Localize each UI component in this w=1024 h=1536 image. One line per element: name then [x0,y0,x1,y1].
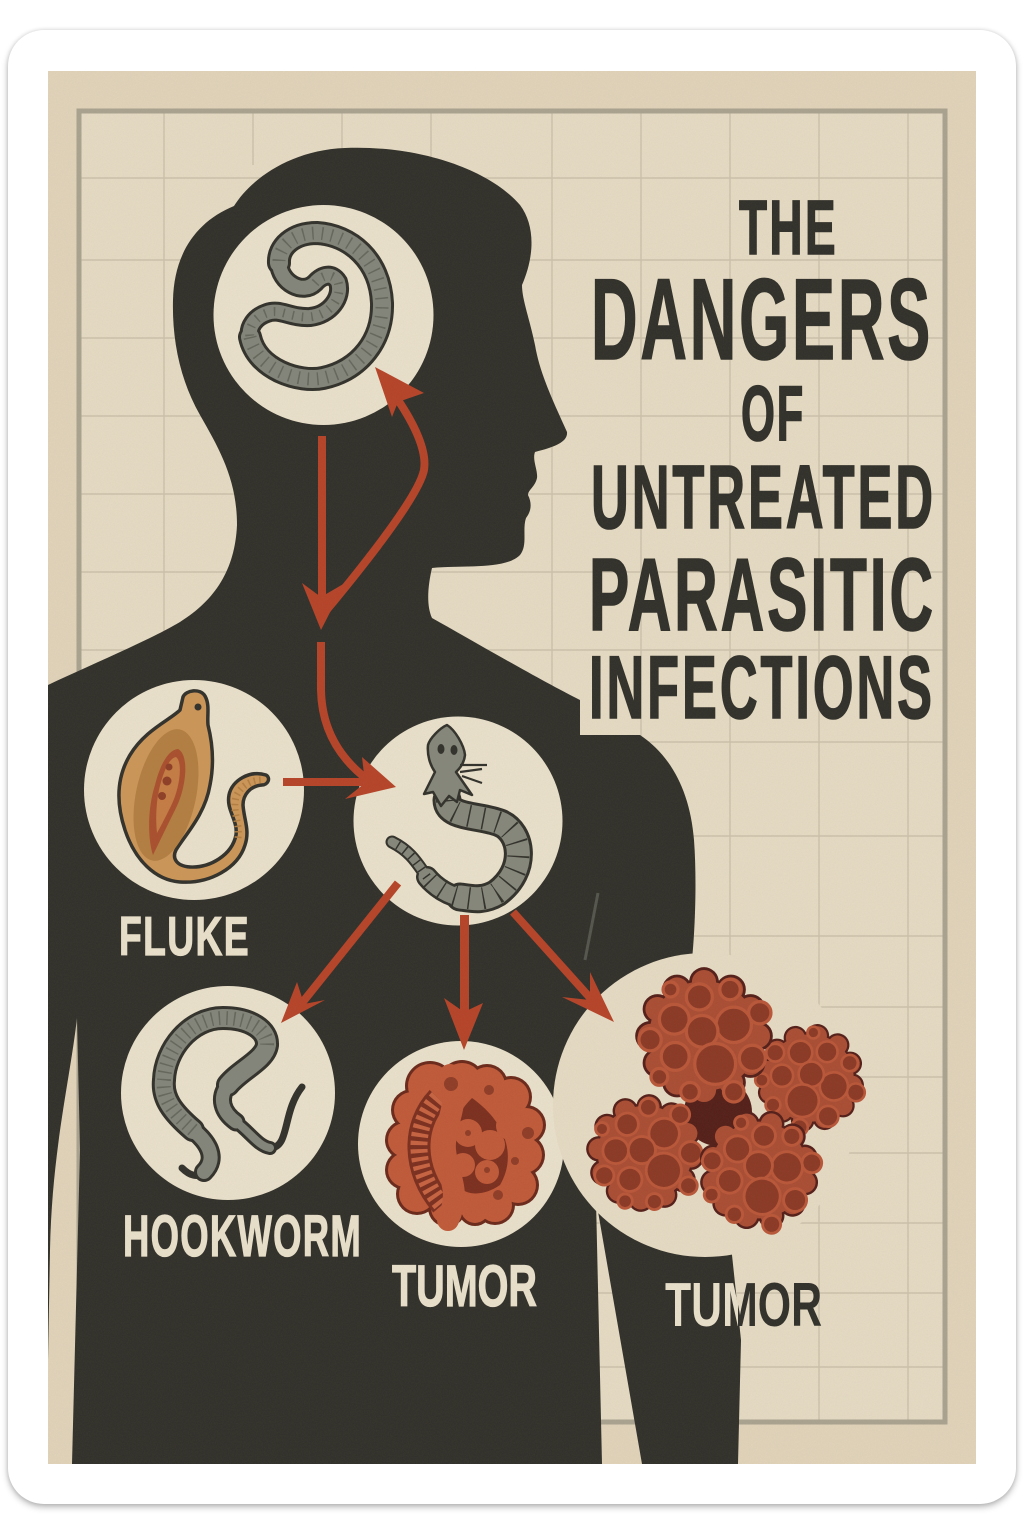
background grid and frame [79,111,945,1424]
arrow head: large tumor [562,972,614,1022]
circle: tumor [358,1041,564,1247]
panel: tumor in body [358,1041,564,1247]
icon: folded tumor mass [385,1060,546,1227]
arrows [281,367,614,1050]
icon: raspberry-like tumor cluster [566,967,887,1244]
icon: liver fluke [119,691,269,882]
arrow head: centre [345,757,396,799]
circle: hookworm [121,986,335,1200]
panel: fluke [84,680,304,900]
arrow: up to brain [325,400,424,612]
arrow head: hookworm [281,982,325,1023]
panel: large tumor clusters [553,953,887,1257]
circle: large tumor [553,953,857,1257]
label: hookworm: HOOKWORM [123,1204,362,1269]
arrow head: down [302,583,345,630]
human silhouette [48,148,741,1464]
circle: fluke [84,680,304,900]
label: large tumor: TUMOR [665,1271,822,1340]
arrow: down from head [318,436,326,600]
arrow: centre to hookworm [302,883,398,1003]
sliver highlight on arm [585,893,598,960]
icon: skull-headed worm [392,725,518,899]
circle: brain [214,205,434,425]
title line: of: OF [741,369,805,457]
title [589,185,936,737]
label: tumor: TUMOR [392,1254,537,1319]
arrow: fluke to centre [283,778,368,786]
title line: the: THE [739,185,838,271]
panel: hookworm [121,986,335,1200]
icon: coiled gray worm [250,233,382,379]
arrow head: tumor [444,998,483,1050]
panel: central worm [354,716,562,926]
icon: hookworm [164,1018,302,1175]
label: fluke: FLUKE [119,905,250,967]
arrow: centre to large tumor [513,912,592,1000]
panel: brain worm [214,205,434,425]
arrow: centre to tumor [460,915,469,1015]
circle: central [354,716,562,926]
arrow head: brain [375,367,424,417]
labels [119,905,537,1319]
arrow: chest to centre [321,642,368,780]
